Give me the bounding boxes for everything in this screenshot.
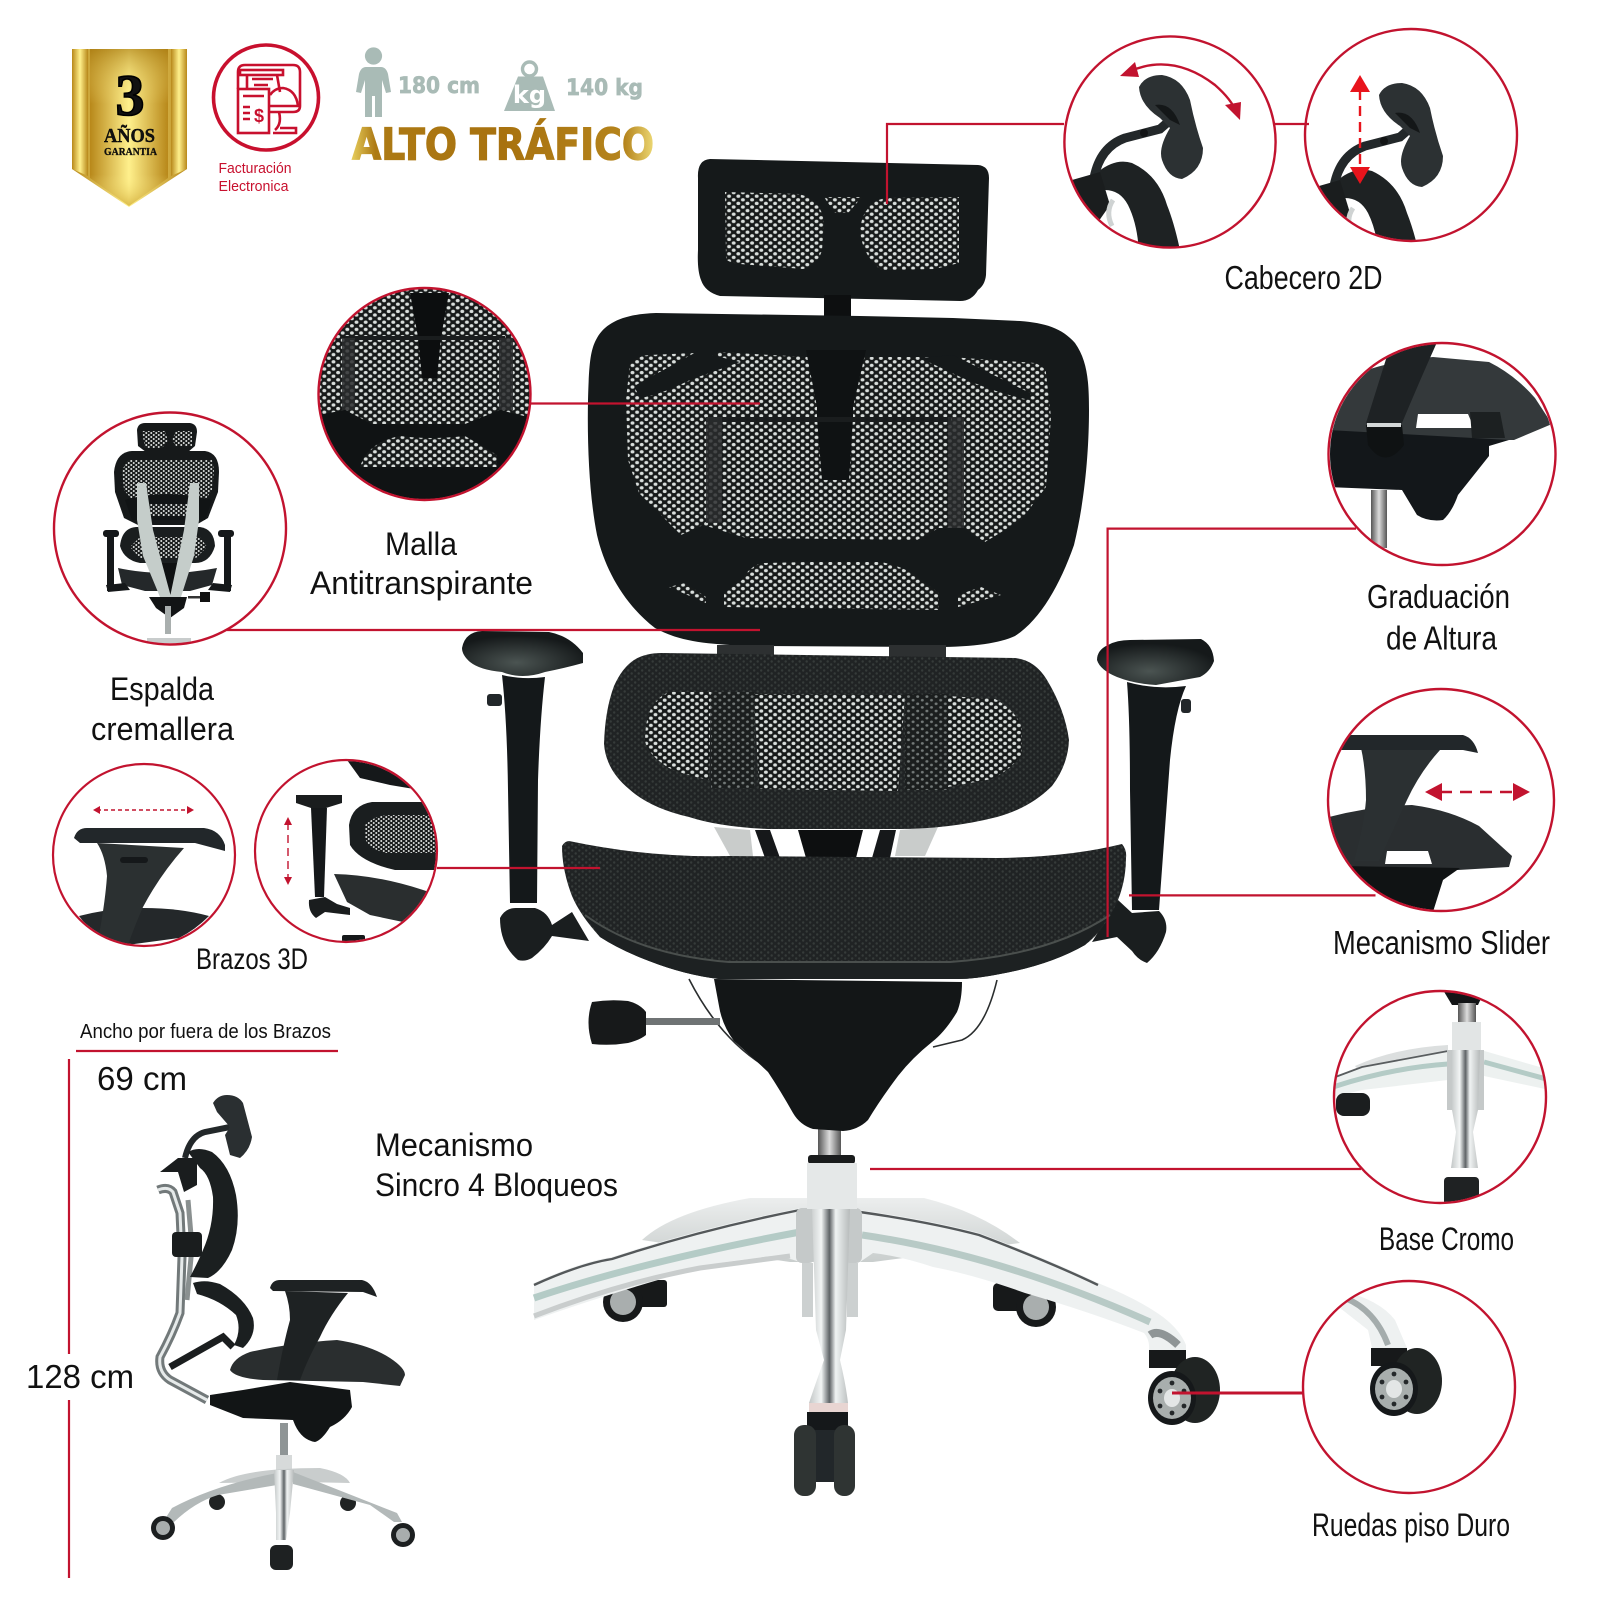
base left arm (534, 1208, 800, 1320)
side seat (230, 1340, 405, 1386)
label: 3D arms: Brazos 3D (196, 943, 308, 976)
backrest mesh (626, 352, 1051, 542)
invoice caption: Electronica (218, 178, 289, 195)
arrow: armrest height (284, 817, 292, 885)
seat back cushion (604, 653, 1069, 829)
side clamps (160, 1158, 202, 1257)
label: 2D headrest: Cabecero 2D (1224, 259, 1382, 296)
icon: person height (356, 47, 391, 117)
right armrest (1092, 639, 1214, 963)
callout circle: height adjustment (1328, 340, 1556, 565)
warranty badge: AÑOS (104, 124, 155, 147)
label: sync mechanism (375, 1127, 618, 1203)
headrest (698, 159, 989, 320)
callout circle: zip back (54, 412, 286, 644)
armrests mini (103, 530, 234, 592)
side base (151, 1468, 415, 1570)
side headrest (185, 1095, 252, 1158)
arrow: headrest rotation (1120, 62, 1241, 120)
left armrest (462, 631, 589, 961)
arrow: slider (1425, 783, 1530, 801)
label: height adjustment: Graduación (1367, 578, 1510, 615)
dimension: height value: 128 cm (26, 1358, 134, 1395)
struts between seat and backrest (714, 827, 938, 858)
label: sync mechanism: Mecanismo (375, 1127, 533, 1163)
front caster (794, 1412, 855, 1496)
callout circle: slider mechanism (1325, 689, 1554, 915)
chair base plate (642, 1198, 1020, 1262)
weight value: 140 kg (566, 76, 643, 101)
label: zip back (91, 671, 234, 747)
back casters (603, 1280, 1056, 1327)
callout circle: mesh detail (318, 287, 532, 505)
side chrome frame (158, 1188, 233, 1400)
backrest lower mesh (724, 562, 939, 610)
arrow: headrest height (1350, 75, 1370, 184)
invoice caption: Facturación (218, 160, 292, 177)
callout connector lines (69, 124, 1376, 1578)
callout circle: chrome base (1330, 990, 1550, 1207)
label: wheels: Ruedas piso Duro (1312, 1507, 1510, 1543)
dimension: width caption: Ancho por fuera de los Brazos (80, 1021, 331, 1043)
icon: weight (504, 62, 555, 111)
label: height adjustment (1367, 578, 1510, 656)
seat (562, 841, 1126, 979)
front leg (796, 1208, 862, 1412)
side armrest (270, 1280, 377, 1380)
label: zip back: Espalda (110, 671, 214, 707)
heading: high traffic: ALTO TRÁFICO (352, 118, 654, 170)
seat mechanism (714, 979, 962, 1131)
label: mesh: Malla (385, 526, 457, 562)
wires (689, 979, 997, 1068)
warranty badge: 3 (116, 63, 144, 128)
callout circle: wheels (1303, 1281, 1515, 1493)
side view chair (151, 1095, 415, 1570)
side column (280, 1423, 288, 1455)
arrow: armrest width (93, 806, 194, 814)
height value: 180 cm (398, 74, 480, 99)
callout circle: armrest height (255, 760, 440, 943)
callout circle: headrest height (1305, 29, 1517, 263)
warranty badge (72, 49, 187, 207)
icon: weight: kg (513, 81, 546, 109)
base right arm (860, 1210, 1186, 1350)
label: slider: Mecanismo Slider (1333, 924, 1550, 961)
label: zip back: cremallera (91, 711, 234, 747)
invoice caption (218, 160, 292, 195)
side back pad (188, 1149, 238, 1278)
icon: electronic invoice (214, 45, 318, 150)
dimension: width value: 69 cm (97, 1060, 187, 1097)
side mechanism (210, 1382, 352, 1442)
warranty badge: GARANTIA (104, 146, 157, 158)
label: mesh (310, 526, 533, 601)
label: sync mechanism: Sincro 4 Bloqueos (375, 1167, 618, 1203)
right front caster (1148, 1350, 1220, 1425)
callout circle: armrest width (53, 764, 235, 946)
side lumbar pad (193, 1281, 254, 1348)
callout circle: headrest rotate (1064, 36, 1276, 255)
gas column (818, 1125, 841, 1157)
backrest (588, 313, 1089, 659)
label: chrome base: Base Cromo (1379, 1221, 1514, 1257)
label: height adjustment: de Altura (1386, 620, 1498, 656)
main chair front view (462, 159, 1220, 1496)
label: mesh: Antitranspirante (310, 565, 533, 601)
icon: electronic invoice: $ (254, 106, 264, 126)
adjustment knob (588, 1000, 720, 1045)
